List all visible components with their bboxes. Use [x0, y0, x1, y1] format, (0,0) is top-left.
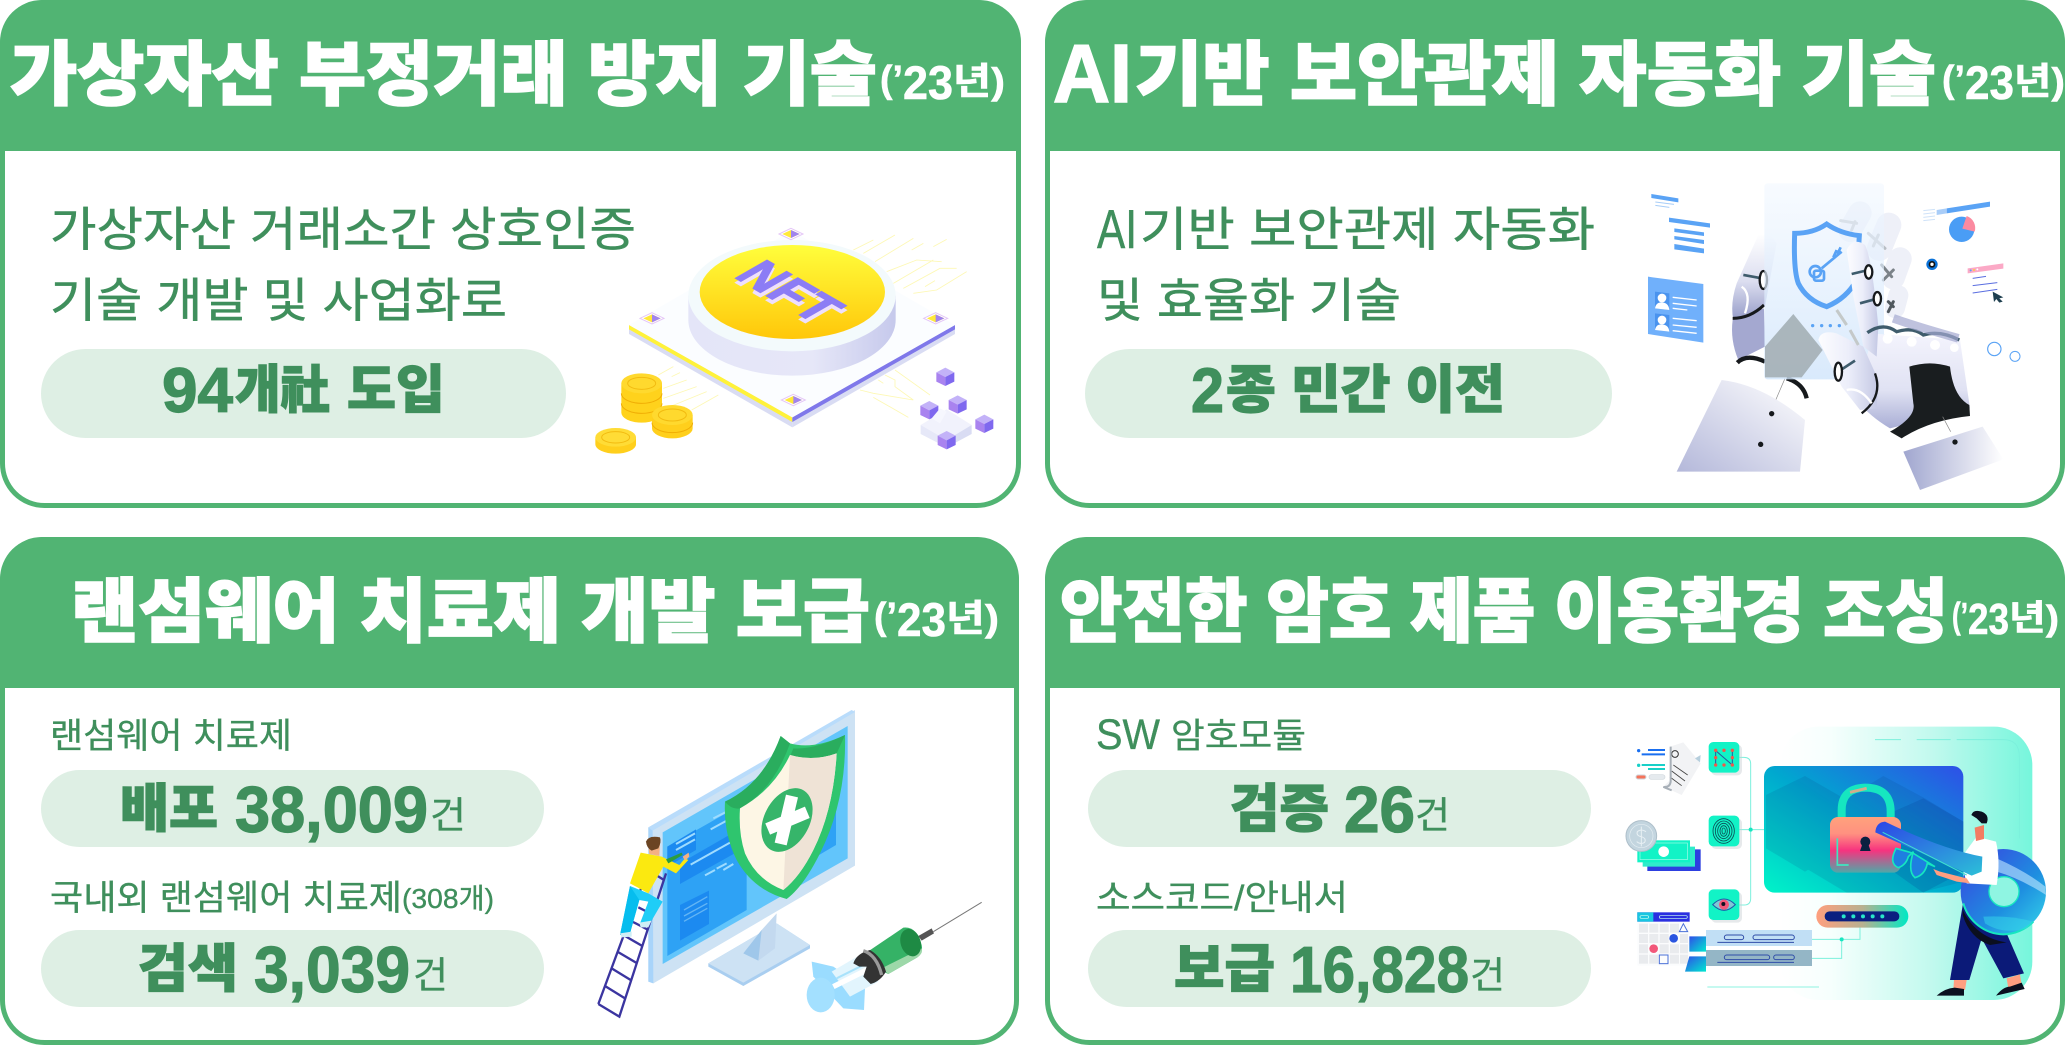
stat pill: 2 — [1191, 356, 1224, 426]
heading: (’ — [874, 596, 897, 638]
NFT lettering: NFT — [722, 258, 856, 334]
fingerprint icon — [1709, 816, 1742, 849]
heading: 랜섬웨어 치료제 개발 보급 — [71, 573, 870, 651]
stat pill: distribution: 배포 — [120, 781, 218, 839]
panel: virtual asset fraud prevention — [0, 0, 1021, 506]
heading: 23 — [903, 56, 953, 109]
stat pill: distribution: 건 — [430, 795, 466, 836]
panel: AI security control automation — [1045, 0, 2065, 506]
pattern lock icon — [1709, 742, 1742, 775]
panel: ransomware recovery tools — [0, 537, 1019, 1042]
left sleeve — [1677, 378, 1805, 472]
stat pill — [1085, 349, 1612, 438]
heading: AI — [1053, 27, 1132, 120]
description text — [50, 203, 636, 327]
connector lines — [1739, 757, 1860, 958]
heading: (’ — [1952, 595, 1968, 636]
stat pill: 개社 — [235, 362, 330, 420]
label: SW crypto module: 암호모듈 — [1171, 717, 1306, 756]
eye icon — [1709, 889, 1742, 923]
glass panel — [1764, 183, 1884, 379]
heading: 안전한 암호 제품 이용환경 조성 — [1060, 573, 1948, 651]
back fingers — [1834, 197, 1915, 320]
stat pill: 도입 — [347, 362, 445, 420]
heading: 가상자산 부정거래 방지 기술 — [10, 36, 877, 114]
password field — [1816, 905, 1908, 928]
stat pill: distribution: 보급 — [1174, 941, 1275, 999]
stat pill: search — [41, 930, 544, 1007]
panel: safe cryptographic products — [1045, 537, 2065, 1042]
illustration: monitor, shield, syringe — [598, 710, 982, 1017]
heading: 년) — [2009, 599, 2059, 638]
stat pill: verification: 건 — [1415, 795, 1450, 836]
heading: 년) — [2014, 61, 2065, 102]
heading: 23 — [1968, 595, 2009, 644]
label: SW crypto module — [1096, 711, 1306, 759]
heading: (’ — [880, 59, 903, 101]
left robot hand — [1732, 234, 1807, 398]
ladder — [598, 873, 666, 1017]
right sleeve — [1903, 417, 2003, 490]
stat pill — [41, 349, 566, 438]
illustration: robot hands and shield — [1648, 183, 2020, 490]
heading: 23 — [897, 593, 946, 646]
floating UI icons — [1648, 194, 2020, 361]
calendar grid icon — [1637, 912, 1690, 966]
climbing man — [620, 837, 689, 937]
shield with key — [1794, 224, 1859, 307]
heading: 기반 보안관제 자동화 기술 — [1135, 36, 1936, 114]
gold coins — [595, 373, 693, 454]
big key and person — [1875, 811, 2046, 996]
stat pill: search: 검색 — [138, 941, 238, 999]
stat pill: distribution: 건 — [1470, 955, 1505, 996]
illustration: lock and key — [1626, 727, 2046, 1000]
heading — [1053, 27, 2065, 120]
label: domestic and overseas tools: 국내외 랜섬웨어 치료제 — [50, 879, 402, 918]
description text: 및 효율화 기술 — [1097, 274, 1401, 327]
monitor — [648, 710, 855, 986]
lock card — [1764, 766, 1963, 893]
heading: 23 — [1965, 56, 2014, 109]
description text — [1097, 198, 1595, 327]
label: ransomware tool: 랜섬웨어 치료제 — [50, 717, 292, 756]
stat pill: distribution: 16,828 — [1290, 933, 1469, 1006]
label: source code and guide: 소스코드/안내서 — [1096, 879, 1348, 918]
shield — [725, 735, 845, 899]
stat pill: verification: 26 — [1344, 773, 1415, 846]
heading: 년) — [946, 598, 999, 639]
stat pill: verification — [1088, 770, 1591, 847]
label: domestic and overseas tools: (308개) — [402, 883, 494, 914]
label: SW crypto module: SW — [1096, 711, 1160, 759]
description text: AI — [1097, 198, 1137, 260]
NFT lettering: NFT — [722, 253, 856, 330]
stat pill: distribution — [1088, 930, 1591, 1007]
illustration: NFT chip platform — [595, 228, 993, 454]
syringe — [807, 902, 982, 1012]
stat pill: distribution: 38,009 — [235, 773, 428, 846]
stat pill: 종 민간 이전 — [1226, 362, 1505, 420]
description text: 기반 보안관제 자동화 — [1140, 203, 1595, 256]
document icon — [1636, 742, 1701, 795]
right robot hand — [1811, 242, 1970, 438]
heading: (’ — [1942, 59, 1965, 101]
purple cubes — [920, 368, 993, 449]
description text: 기술 개발 및 사업화로 — [50, 274, 507, 327]
stat pill: 94 — [162, 356, 233, 426]
stat pill: verification: 검증 — [1230, 781, 1329, 839]
inserted key — [1875, 822, 1982, 876]
stat pill: search: 3,039 — [254, 933, 410, 1006]
description text: 가상자산 거래소간 상호인증 — [50, 203, 636, 256]
coin and cash icon — [1626, 821, 1701, 871]
stat pill: search: 건 — [413, 955, 448, 996]
heading: 년) — [953, 61, 1005, 102]
server bars — [1685, 930, 1812, 972]
stat pill: distribution — [41, 770, 544, 847]
